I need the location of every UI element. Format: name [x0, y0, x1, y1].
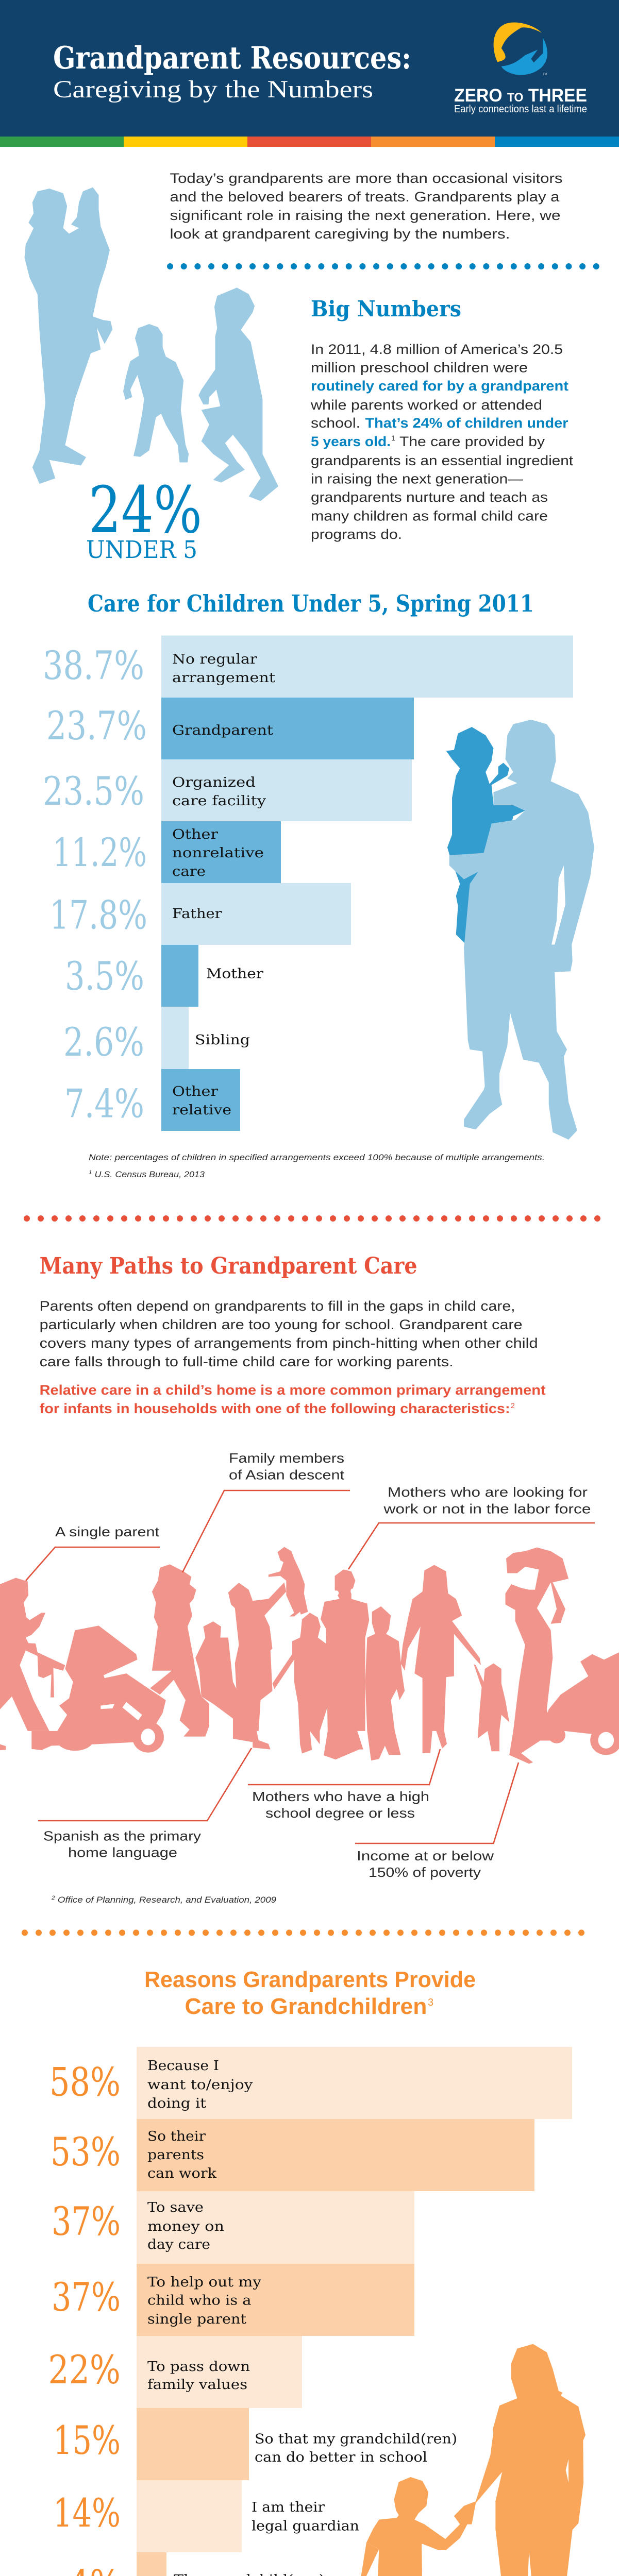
bar labels: Mother: [206, 967, 264, 982]
Big Numbers text: million preschool children were: [311, 360, 528, 375]
label: Spanish: Spanish as the primary: [43, 1828, 201, 1843]
Many Paths paragraph: Parents often depend on grandparents to fill in the gaps in child care,: [40, 1298, 515, 1314]
bar labels: relative: [172, 1103, 231, 1118]
Big Numbers text: The care provided by: [399, 434, 545, 449]
Many Paths paragraph: [40, 1298, 538, 1369]
bar labels: day care: [147, 2237, 210, 2252]
Many Paths callout: Relative care in a child’s home is a more common primary arrangement: [40, 1382, 546, 1398]
bar labels: family values: [147, 2377, 247, 2393]
stat: 24% under 5: 24%: [89, 473, 202, 548]
bar labels: [145, 2058, 457, 2576]
label: Mothers high school: school degree or less: [265, 1805, 415, 1821]
percent values: 2.6%: [63, 1019, 144, 1065]
title: Grandparent Resources:: [53, 40, 411, 76]
heading: Reasons Grandparents: 3: [428, 1997, 433, 2008]
bar labels: [172, 652, 276, 1118]
bar labels: To help out my: [147, 2275, 261, 2290]
label: Income: [357, 1848, 494, 1880]
Big Numbers text: school.: [311, 415, 360, 431]
label: Income: 150% of poverty: [369, 1865, 481, 1880]
footnote 2: 2: [51, 1895, 55, 1901]
chart footnotes: U.S. Census Bureau, 2013: [92, 1170, 205, 1179]
logo: Zero to Three: Early connections last a lifetime: [454, 104, 587, 115]
header banner: [0, 0, 619, 147]
bar labels: Because I: [147, 2058, 219, 2074]
label: Family members: [229, 1450, 345, 1483]
Big Numbers text: routinely cared for by a grandparent: [311, 378, 568, 394]
percent values: 23.5%: [43, 768, 144, 814]
label: Spanish: home language: [68, 1845, 177, 1860]
Big Numbers text: 1: [391, 434, 395, 442]
silhouette: grandmother and grandchild: [359, 2344, 585, 2576]
bar labels: So that my grandchild(ren): [255, 2432, 457, 2447]
percent values: 37%: [52, 2274, 121, 2320]
intro paragraph: significant role in raising the next generation. Here, we: [170, 208, 561, 223]
bar labels: parents: [147, 2147, 204, 2163]
Many Paths callout: 2: [511, 1401, 515, 1410]
bar labels: arrangement: [172, 670, 276, 686]
heading: Big Numbers: Big Numbers: [311, 296, 461, 321]
silhouette: family walking: [24, 188, 278, 501]
label: Mothers looking for work: [383, 1484, 591, 1517]
bar labels: Father: [172, 906, 222, 922]
grandmother: [493, 2344, 585, 2576]
Many Paths paragraph: care falls through to full-time child care for working parents.: [40, 1354, 454, 1369]
Many Paths paragraph: covers many types of arrangements from pinch-hitting when other child: [40, 1335, 538, 1351]
bar labels: care facility: [172, 793, 266, 809]
silhouette: grandfather holding child: [446, 720, 594, 1140]
bars: [161, 636, 573, 1131]
bar labels: legal guardian: [252, 2518, 359, 2534]
grandfather: [449, 720, 594, 1140]
bar labels: want to/enjoy: [147, 2077, 253, 2093]
Big Numbers text: while parents worked or attended: [310, 397, 542, 413]
heading: Many Paths: Many Paths to Grandparent Care: [40, 1253, 417, 1279]
percent values: 15%: [53, 2417, 121, 2463]
stat: 24% under 5: UNDER 5: [86, 536, 197, 564]
intro paragraph: look at grandparent caregiving by the numbers.: [170, 226, 510, 242]
Big Numbers text: grandparents is an essential ingredient: [311, 453, 574, 468]
percent values: 11.2%: [53, 829, 147, 875]
grandmother arm: [454, 2431, 509, 2524]
chart footnotes: 1: [89, 1170, 92, 1176]
heading: Reasons Grandparents: Reasons Grandparents Provide: [144, 1967, 476, 1992]
percent values: 37%: [52, 2198, 121, 2244]
bars: [137, 2047, 572, 2576]
label: Mothers high school: [252, 1789, 429, 1821]
percent values: 3.5%: [65, 953, 144, 999]
percent values: 7.4%: [64, 1081, 144, 1127]
older boy: [198, 287, 278, 501]
adult carrying child: [24, 188, 112, 484]
label: Mothers looking for work: work or not in the labor force: [383, 1501, 591, 1517]
percent values: [43, 642, 147, 1127]
bar labels: doing it: [147, 2096, 207, 2111]
heading: Reasons Grandparents: [144, 1967, 476, 2019]
bar labels: To save: [147, 2200, 204, 2215]
intro paragraph: [170, 171, 563, 242]
Big Numbers text: grandparents nurture and teach as: [311, 489, 548, 505]
leader lines: [26, 1490, 595, 1843]
bar labels: child who is a: [147, 2293, 252, 2308]
percent values: 58%: [49, 2059, 121, 2105]
Many Paths paragraph: particularly when children are too young for school. Grandparent care: [40, 1317, 523, 1332]
label: Mothers high school: Mothers who have a high: [252, 1789, 429, 1804]
intro paragraph: and the beloved bearers of treats. Grandparents play a: [170, 189, 560, 205]
header colour bar: [0, 137, 619, 147]
grandchild: [366, 2477, 468, 2576]
percent values: 38.7%: [43, 642, 144, 688]
label: Spanish: [43, 1828, 201, 1860]
label: A single parent: A single parent: [55, 1524, 160, 1539]
stat: 24% under 5: [86, 473, 202, 564]
bar labels: Grandparent: [172, 723, 274, 738]
bar labels: Sibling: [195, 1032, 250, 1048]
label: Income: Income at or below: [357, 1848, 494, 1863]
bar chart: reasons: [48, 2047, 572, 2576]
Big Numbers text: programs do.: [311, 527, 402, 542]
child: [446, 727, 525, 948]
small girl: [123, 324, 189, 462]
chart footnotes: Note: percentages of children in specified arrangements exceed 100% because of multiple arrangements.: [89, 1153, 545, 1162]
percent values: 53%: [51, 2129, 121, 2175]
Big Numbers text: That’s 24% of children under: [365, 415, 568, 431]
Big Numbers text: in raising the next generation—: [311, 471, 523, 487]
Big Numbers text: many children as formal child care: [311, 509, 548, 524]
bar labels: can work: [147, 2166, 216, 2181]
percent values: 22%: [48, 2347, 121, 2393]
bar labels: single parent: [147, 2312, 247, 2327]
heading: Care for Children: Care for Children Under 5, Spring 2011: [88, 590, 534, 617]
bar labels: money on: [147, 2219, 224, 2234]
bar labels: Other: [172, 827, 219, 842]
label: Family members: of Asian descent: [229, 1467, 345, 1483]
logo: Zero to Three: [454, 23, 587, 115]
bar labels: I am their: [252, 2500, 325, 2515]
bar labels: So their: [147, 2129, 206, 2144]
Big Numbers text: In 2011, 4.8 million of America’s 20.5: [311, 342, 563, 357]
percent values: [48, 2059, 121, 2576]
heading: Reasons Grandparents: Care to Grandchildren: [185, 1994, 427, 2019]
bar labels: can do better in school: [255, 2450, 427, 2465]
bar labels: nonrelative: [172, 845, 264, 861]
subtitle: Caregiving by the Numbers: [53, 76, 373, 103]
bar labels: Organized: [172, 775, 256, 790]
Big Numbers text: 5 years old.: [311, 434, 391, 449]
Many Paths callout: [40, 1382, 546, 1416]
bar labels: No regular: [172, 652, 258, 667]
Big Numbers text: [310, 342, 574, 542]
percent values: 23.7%: [46, 703, 147, 749]
percent values: 17.8%: [49, 892, 147, 938]
bar labels: care: [172, 864, 206, 879]
logo: Zero to Three: ZERO TO THREE: [454, 86, 587, 106]
Many Paths callout: for infants in households with one of the following characteristics:: [40, 1401, 510, 1416]
footnote 2: Office of Planning, Research, and Evaluation, 2009: [55, 1895, 277, 1905]
label: Mothers looking for work: Mothers who are looking for: [388, 1484, 588, 1500]
bar labels: To pass down: [147, 2359, 250, 2375]
percent values: 14%: [53, 2490, 121, 2536]
logo: Zero to Three: TM: [543, 73, 547, 76]
label: Family members: Family members: [229, 1450, 344, 1466]
intro paragraph: Today’s grandparents are more than occasional visitors: [170, 171, 563, 186]
chart footnotes: [89, 1153, 545, 1179]
bar labels: Other: [172, 1084, 219, 1099]
silhouette: group of families: [0, 1547, 619, 1764]
bar chart: care arrangements: [43, 636, 573, 1131]
